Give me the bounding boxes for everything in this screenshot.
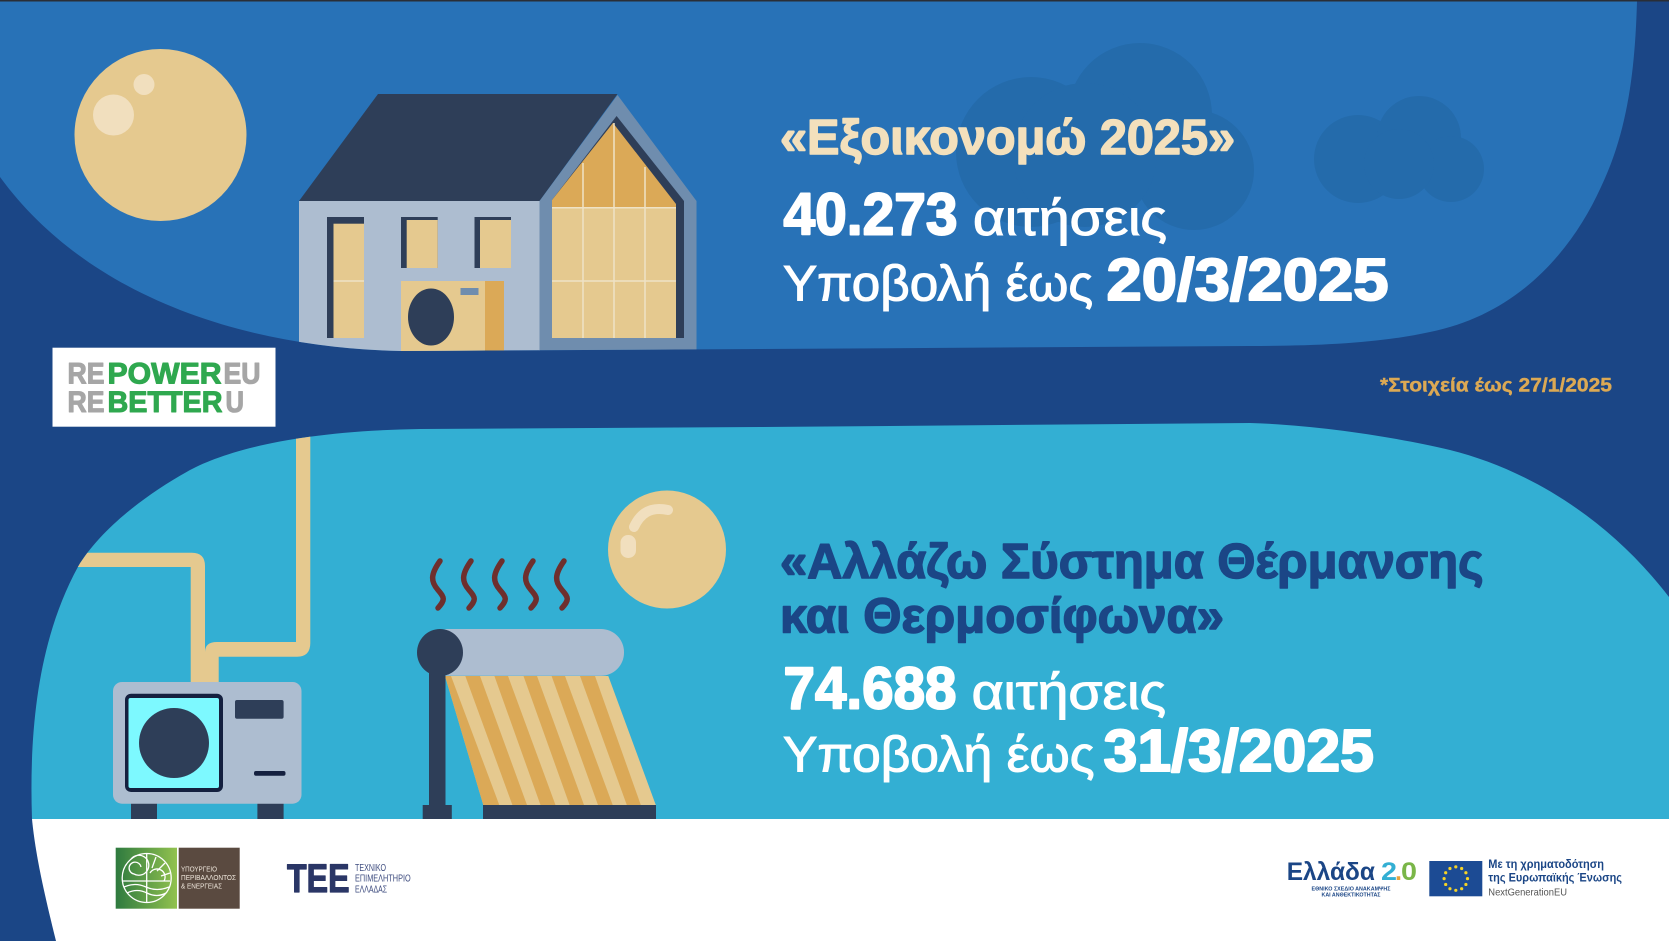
heading: «Εξοικονομώ 2025» xyxy=(780,110,1235,165)
deadline label: Υποβολή έως xyxy=(783,256,1093,312)
footnote: *Στοιχεία έως 27/1/2025 xyxy=(1380,375,1612,397)
logo: Technical Chamber of Greece: ΤΕΕ xyxy=(287,857,350,901)
icon: EU flag xyxy=(1429,861,1482,896)
panel: Αλλάζω Σύστημα Θέρμανσης background xyxy=(31,423,1669,819)
logo: REPowerEU: BETTER xyxy=(108,386,223,419)
text block: EU funding: Με τη χρηματοδότηση xyxy=(1488,859,1604,871)
panel: Εξοικονομώ 2025 background xyxy=(0,2,1637,351)
icon: heat waves xyxy=(433,561,567,608)
text block: Αλλάζω Σύστημα Θέρμανσης xyxy=(780,534,1484,784)
icon: solar water heater xyxy=(417,629,656,819)
footer band xyxy=(32,819,1669,941)
text block: EU funding xyxy=(1488,859,1622,899)
logo: Greece 2.0: 0 xyxy=(1401,858,1417,886)
logo: Ministry of Environment and Energy: ΠΕΡΙΒΑΛΛΟΝΤΟΣ xyxy=(181,873,236,882)
icon: moon bottom xyxy=(608,490,726,608)
logo: Technical Chamber of Greece: ΕΠΙΜΕΛΗΤΗΡΙΟ xyxy=(355,873,411,885)
logo: REPowerEU: POWER xyxy=(108,358,222,390)
heading line 2: και Θερμοσίφωνα» xyxy=(780,589,1224,644)
logo: Greece 2.0: ΕΘΝΙΚΟ ΣΧΕΔΙΟ ΑΝΑΚΑΜΨΗΣ xyxy=(1312,887,1391,893)
logo: REPowerEU: U xyxy=(226,386,244,419)
logo: Greece 2.0: . xyxy=(1395,858,1402,886)
text block: EU funding: NextGenerationEU xyxy=(1488,887,1567,899)
icon: pipes xyxy=(78,436,310,682)
heading: «Αλλάζω Σύστημα Θέρμανσης xyxy=(780,534,1484,589)
logo: Technical Chamber of Greece xyxy=(287,857,411,901)
icon: moon top xyxy=(74,49,246,221)
logo: REPowerEU: RE xyxy=(68,386,104,419)
logo: Technical Chamber of Greece: ΤΕΧΝΙΚΟ xyxy=(355,862,386,874)
logo: REPowerEU xyxy=(52,348,276,427)
icon: house xyxy=(299,94,696,353)
text block: Εξοικονομώ 2025 xyxy=(780,110,1388,313)
logo: Greece 2.0: Ελλάδα xyxy=(1287,858,1376,886)
text block: EU funding: της Ευρωπαϊκής Ένωσης xyxy=(1488,873,1622,885)
number of applications: 74.688 xyxy=(784,656,956,722)
logo: Ministry of Environment and Energy: ΥΠΟΥΡΓΕΙΟ xyxy=(181,865,217,874)
logo: Greece 2.0 xyxy=(1287,858,1417,898)
logo: REPowerEU: EU xyxy=(224,358,260,390)
logo: Ministry of Environment and Energy xyxy=(116,848,240,909)
logo: Greece 2.0: ΚΑΙ ΑΝΘΕΚΤΙΚΟΤΗΤΑΣ xyxy=(1322,892,1381,898)
logo: Ministry of Environment and Energy: & ΕΝΕΡΓΕΙΑΣ xyxy=(181,881,222,890)
deadline label: Υποβολή έως xyxy=(783,727,1094,783)
icon: clouds xyxy=(956,43,1484,230)
applications word: αιτήσεις xyxy=(972,664,1166,720)
deadline date: 20/3/2025 xyxy=(1106,247,1388,313)
logo: Greece 2.0: 2 xyxy=(1381,858,1397,886)
icon: outdoor heat pump unit xyxy=(113,682,302,819)
logo: Technical Chamber of Greece: ΕΛΛΑΔΑΣ xyxy=(355,883,387,895)
applications word: αιτήσεις xyxy=(973,190,1167,246)
logo: REPowerEU: RE xyxy=(68,358,104,390)
number of applications: 40.273 xyxy=(784,182,958,248)
deadline date: 31/3/2025 xyxy=(1104,718,1374,784)
